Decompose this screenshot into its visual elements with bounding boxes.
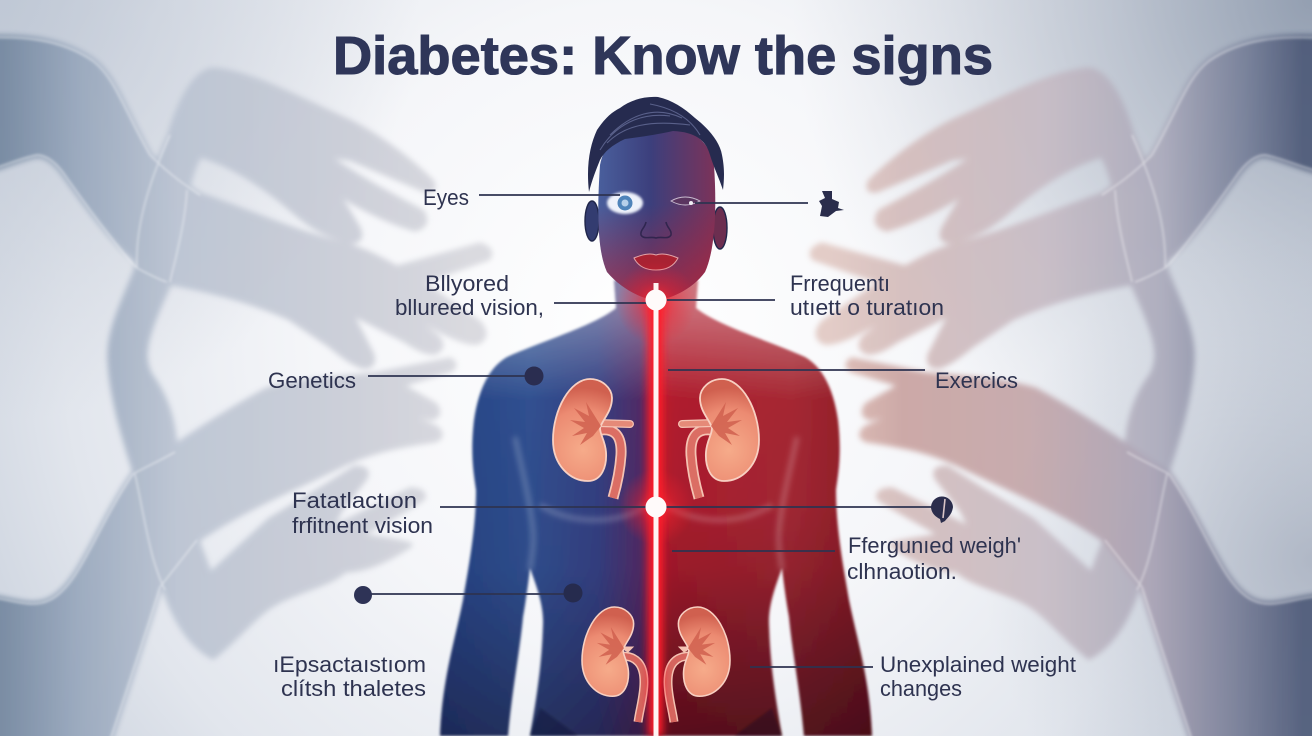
title: Diabetes: Know the signs: [333, 26, 993, 86]
label: blurred vision: Bllyored: [425, 271, 509, 296]
label: frequent weight: Ffergunıed weigh': [848, 533, 1021, 558]
label: blurred vision: bllureed vision,: [395, 295, 544, 320]
label: frequent urination: utıett o turatıon: [790, 295, 944, 320]
glowing central line: [616, 261, 696, 736]
label: frequent urination: Frrequentı: [790, 271, 890, 296]
lower torso shading: [530, 708, 782, 736]
hair: [588, 97, 724, 192]
label: unexplained weight changes: changes: [880, 676, 962, 701]
torso and arms: [440, 280, 880, 736]
label: epsactaistiom: [273, 652, 426, 701]
label: unexplained weight changes: [880, 652, 1076, 701]
translucent hands: left side: [0, 37, 490, 736]
labels: left column: [268, 185, 544, 701]
chest and arm highlights: [515, 437, 797, 570]
icon: small symbol beside eye line: [819, 191, 844, 217]
label: frequent urination: [790, 271, 944, 320]
label: genetics: Genetics: [268, 368, 356, 393]
label: eyes: Eyes: [423, 185, 469, 210]
labels: right column: [790, 271, 1076, 701]
label: unexplained weight changes: Unexplained weight: [880, 652, 1076, 677]
kidneys: [553, 379, 759, 722]
label: epsactaistiom: ıEpsactaıstıom: [273, 652, 426, 677]
human figure: [440, 97, 880, 736]
label: epsactaistiom: clítsh thaletes: [281, 676, 426, 701]
label: frequent weight: clhnaotion.: [847, 559, 957, 584]
nose: [641, 222, 671, 238]
eyes: [607, 192, 700, 214]
mouth: [634, 254, 678, 270]
translucent hands: right side: [812, 37, 1312, 736]
leader lines: [363, 195, 936, 667]
label: fatal action: frfitnent vision: [292, 513, 433, 538]
face: [598, 124, 715, 300]
ears: [585, 201, 727, 249]
icon: leaf marker: [931, 496, 953, 523]
marker dots: [354, 290, 666, 604]
label: exercise: Exercics: [935, 368, 1018, 393]
label: frequent weight: [847, 533, 1021, 584]
label: fatal action: [292, 488, 433, 538]
label: fatal action: Fatatlactıon: [292, 488, 417, 513]
label: blurred vision: [395, 271, 544, 320]
